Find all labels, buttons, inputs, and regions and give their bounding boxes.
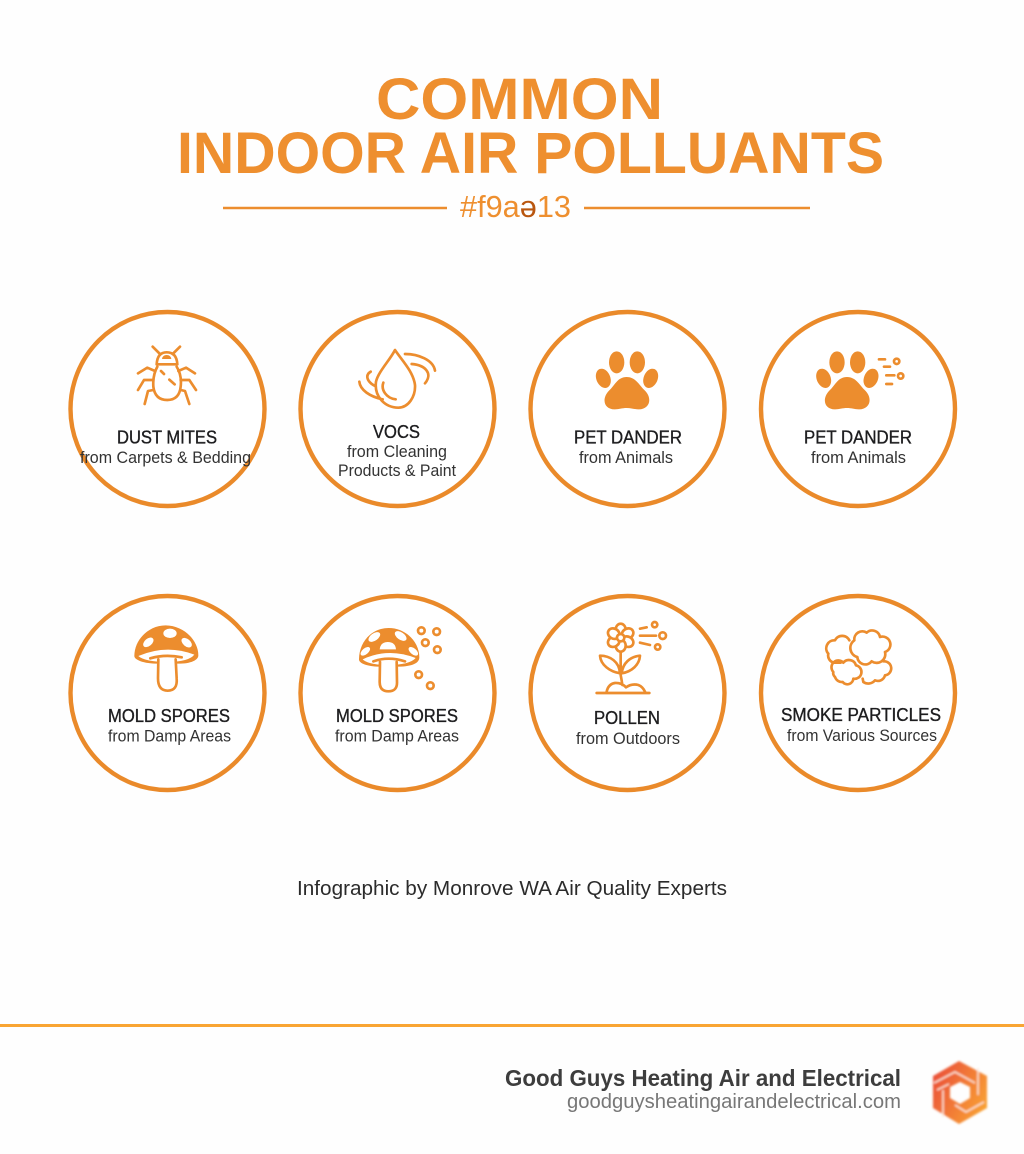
footer company text: Good Guys Heating Air and Electrical: [505, 1065, 901, 1091]
label: dust mites: DUST MITES: [117, 428, 217, 448]
label: pet dander 1: from Animals: [579, 449, 673, 467]
icon: paw: [593, 351, 661, 409]
label: smoke particles: [781, 705, 941, 745]
label: pet dander 2: [804, 428, 912, 467]
title: INDOOR AIR POLLUANTS: [177, 121, 884, 186]
label: pollen: POLLEN: [594, 708, 660, 728]
icon: paw with particles: [813, 351, 903, 409]
icon: smoke clouds: [826, 630, 891, 684]
panel: pet dander 1: [530, 312, 724, 506]
panel: VOCs: [300, 312, 494, 506]
label: mold spores 1: from Damp Areas: [108, 728, 231, 746]
label: pet dander 1: PET DANDER: [574, 428, 682, 448]
label: VOCs: Products & Paint: [338, 462, 456, 480]
label: smoke particles: SMOKE PARTICLES: [781, 705, 941, 725]
panel: pollen: [530, 596, 724, 790]
label: dust mites: from Carpets & Bedding: [80, 449, 251, 467]
panel: mold spores 2: [300, 596, 494, 790]
icon: mushroom: [134, 625, 198, 691]
label: VOCs: [338, 422, 456, 480]
panel: dust mites: [70, 312, 264, 506]
label: smoke particles: from Various Sources: [787, 727, 937, 745]
label: pollen: from Outdoors: [576, 730, 680, 748]
panel: pet dander 2: [761, 312, 955, 506]
title: [177, 67, 884, 186]
label: pet dander 2: from Animals: [811, 449, 906, 467]
icon: flower with pollen: [597, 622, 666, 693]
label: pet dander 2: PET DANDER: [804, 428, 912, 448]
label: pet dander 1: [574, 428, 682, 467]
icon: company logo: [933, 1061, 987, 1124]
label: VOCs: from Cleaning: [347, 443, 447, 461]
label: mold spores 2: MOLD SPORES: [336, 706, 458, 726]
footer company text: goodguysheatingairandelectrical.com: [567, 1091, 901, 1113]
icon: drop with fumes: [359, 350, 435, 408]
subtitle with rules: #f9aə13: [460, 189, 571, 224]
title: COMMON: [376, 67, 663, 132]
label: mold spores 2: from Damp Areas: [335, 728, 459, 746]
footer company text: [505, 1065, 901, 1113]
label: mold spores 1: MOLD SPORES: [108, 706, 230, 726]
icon: mushroom with spores: [359, 627, 441, 691]
footer divider: [0, 1024, 1024, 1027]
caption: Infographic by Monrove WA Air Quality Experts: [297, 878, 727, 900]
panel: smoke particles: [761, 596, 955, 790]
label: dust mites: [80, 428, 251, 467]
icon: dust mite: [138, 347, 196, 404]
label: VOCs: VOCS: [373, 422, 420, 442]
panel: mold spores 1: [70, 596, 264, 790]
label: mold spores 2: [335, 706, 459, 746]
label: mold spores 1: [108, 706, 231, 746]
label: pollen: [576, 708, 680, 748]
